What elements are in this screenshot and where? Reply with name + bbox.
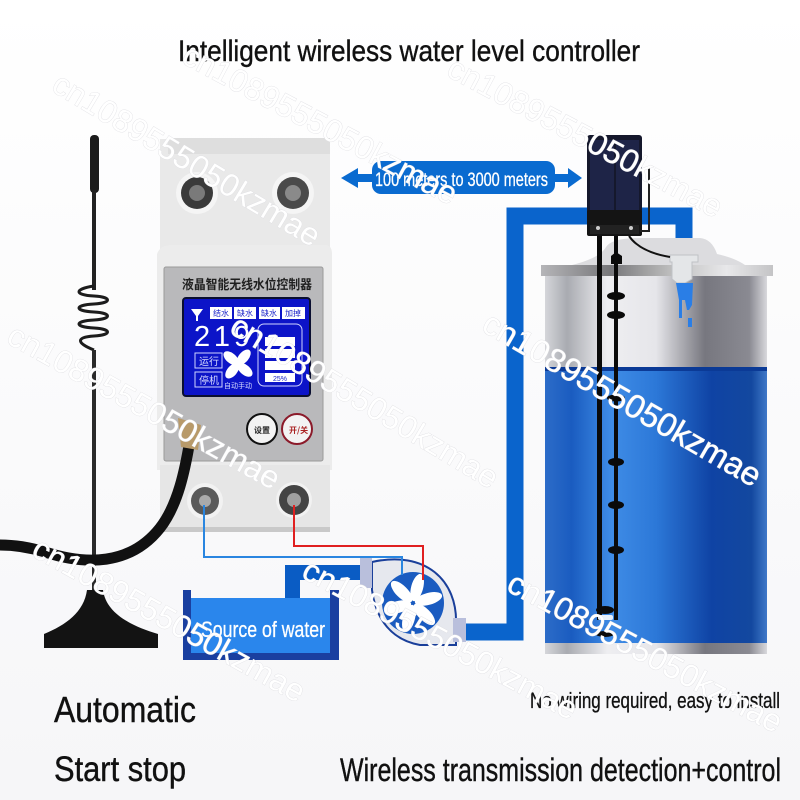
device model name: 液晶智能无线水位控制器 <box>182 274 312 293</box>
water pump <box>360 558 466 645</box>
watermarks: cn1089555050kzmae <box>224 307 505 496</box>
float sensors <box>596 235 625 637</box>
controller bottom housing <box>160 465 330 532</box>
antenna base <box>44 590 158 648</box>
tank dome lid <box>572 238 745 265</box>
feature label: automatic: Automatic <box>54 689 196 730</box>
power button <box>282 414 312 444</box>
distance arrow label <box>341 161 582 194</box>
watermarks: cn1089555050kzmae <box>46 65 327 254</box>
cable connector <box>178 418 201 450</box>
tank water <box>545 367 767 644</box>
watermarks: cn1089555050kzmae <box>297 551 584 727</box>
feature label: start stop: Start stop <box>54 750 186 789</box>
LCD screen: 缺水 <box>261 308 277 318</box>
LCD screen: 25% <box>273 376 287 383</box>
LCD screen: 自动手动 <box>224 381 252 391</box>
antenna <box>0 135 201 648</box>
settings button: 设置 <box>254 425 270 436</box>
controller top housing <box>160 139 330 249</box>
LCD screen: 结水 <box>213 308 229 318</box>
LCD screen <box>183 298 310 396</box>
LCD screen: 停机 <box>199 374 219 387</box>
water pipe to tank <box>466 216 684 632</box>
fan glyph <box>213 339 263 389</box>
settings button <box>247 414 277 444</box>
watermarks: cn1089555050kzmae <box>177 36 464 212</box>
power button: 开/关 <box>289 425 308 436</box>
control wires <box>204 505 423 580</box>
LCD screen: 加掉 <box>285 308 301 318</box>
water outlet <box>670 255 698 327</box>
tank <box>541 238 773 654</box>
LCD screen: 219 <box>194 321 250 353</box>
antenna cable <box>0 440 190 560</box>
watermarks: cn1089555050kzmae <box>27 530 312 709</box>
top terminals <box>176 172 314 214</box>
title: Intelligent wireless water level controller <box>178 35 640 68</box>
source of water tank: Source of water <box>201 617 325 642</box>
watermarks: cn1089555050kzmae <box>442 49 729 225</box>
LCD screen: 缺水 <box>237 308 253 318</box>
LCD screen: 运行 <box>199 355 219 368</box>
controller device <box>157 138 332 532</box>
front label plate <box>164 267 323 461</box>
tank body <box>545 275 767 368</box>
source of water tank <box>183 590 339 660</box>
distance arrow label: 100 meters to 3000 meters <box>375 170 548 191</box>
bottom terminals <box>187 482 312 519</box>
tank rim <box>541 265 773 276</box>
inlet pipe <box>285 565 362 598</box>
watermarks: cn1089555050kzmae <box>2 317 287 496</box>
watermarks: cn1089555050kzmae <box>502 564 789 740</box>
watermarks: cn1089555050kzmae <box>476 304 768 494</box>
solar sensor unit <box>587 135 670 257</box>
